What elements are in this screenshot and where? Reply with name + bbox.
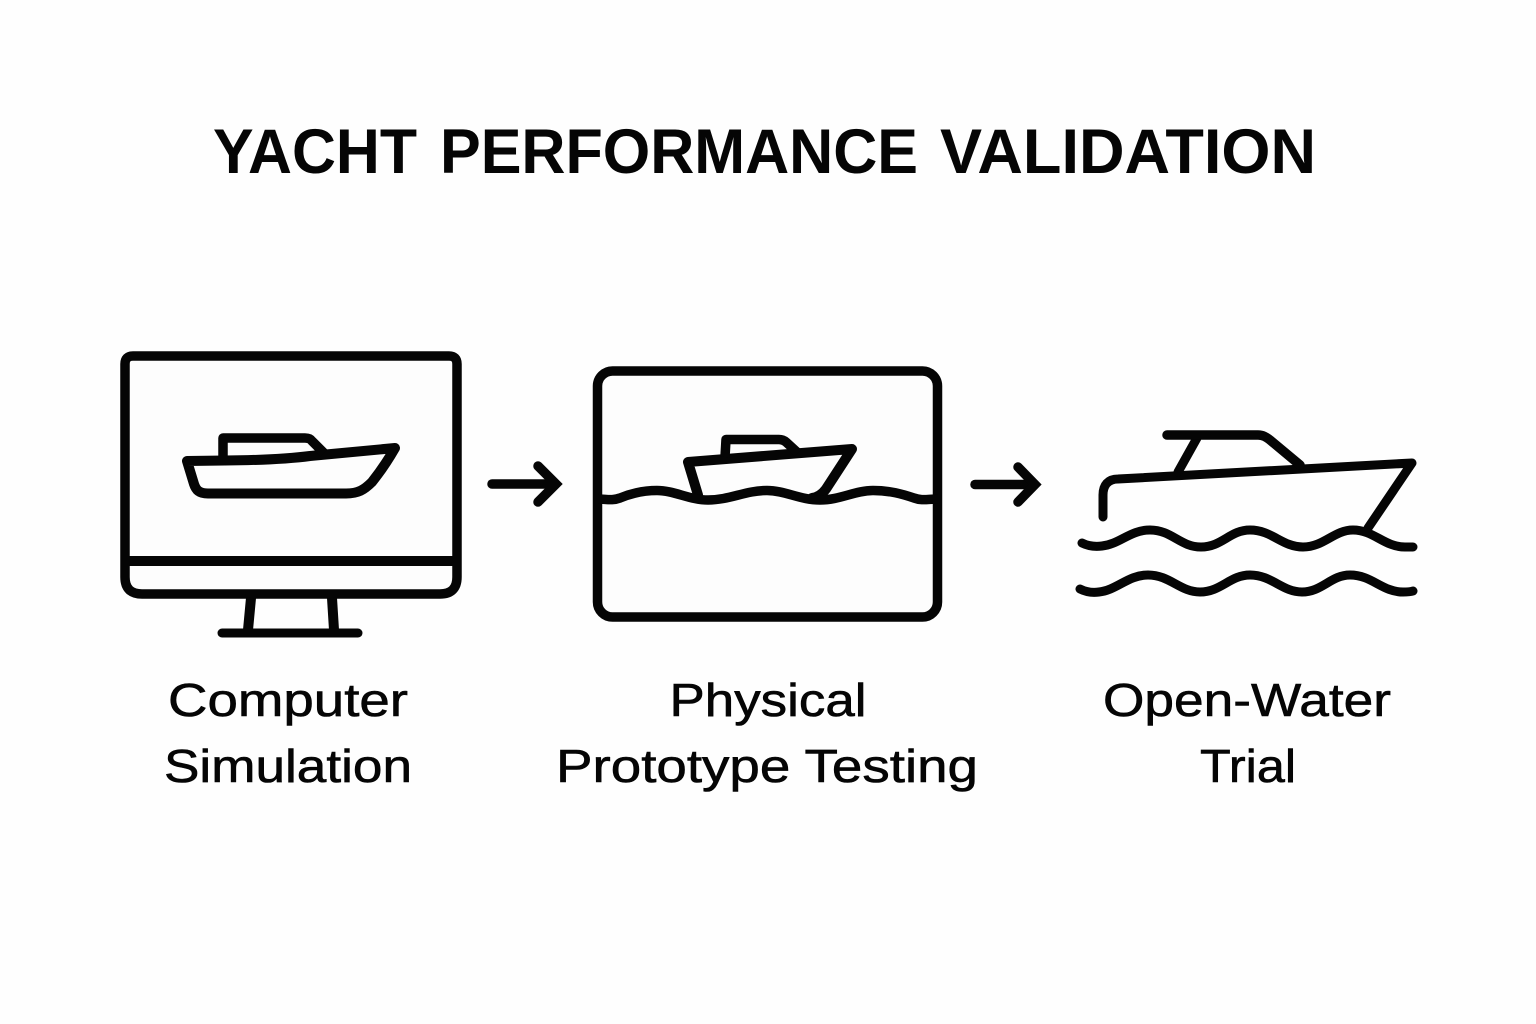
label: computer simulation [164, 674, 412, 792]
icon: yacht on open water [1080, 435, 1413, 592]
label: physical prototype testing [556, 674, 978, 792]
title: PERFORMANCE [440, 117, 918, 187]
arrow: simulation to prototype [492, 466, 556, 502]
label: physical prototype testing: Prototype Testing [556, 740, 978, 792]
title: YACHT [213, 117, 417, 187]
icon: prototype tank with yacht [598, 371, 938, 617]
icon: computer monitor with yacht [125, 356, 457, 633]
title: VALIDATION [940, 117, 1316, 187]
label: open-water trial [1103, 674, 1391, 792]
label: open-water trial: Open-Water [1103, 674, 1391, 726]
label: computer simulation: Computer [168, 674, 408, 726]
label: open-water trial: Trial [1200, 740, 1296, 792]
label: computer simulation: Simulation [164, 740, 412, 792]
title [213, 117, 1316, 187]
label: physical prototype testing: Physical [670, 674, 866, 726]
arrow: prototype to open water [975, 467, 1035, 502]
